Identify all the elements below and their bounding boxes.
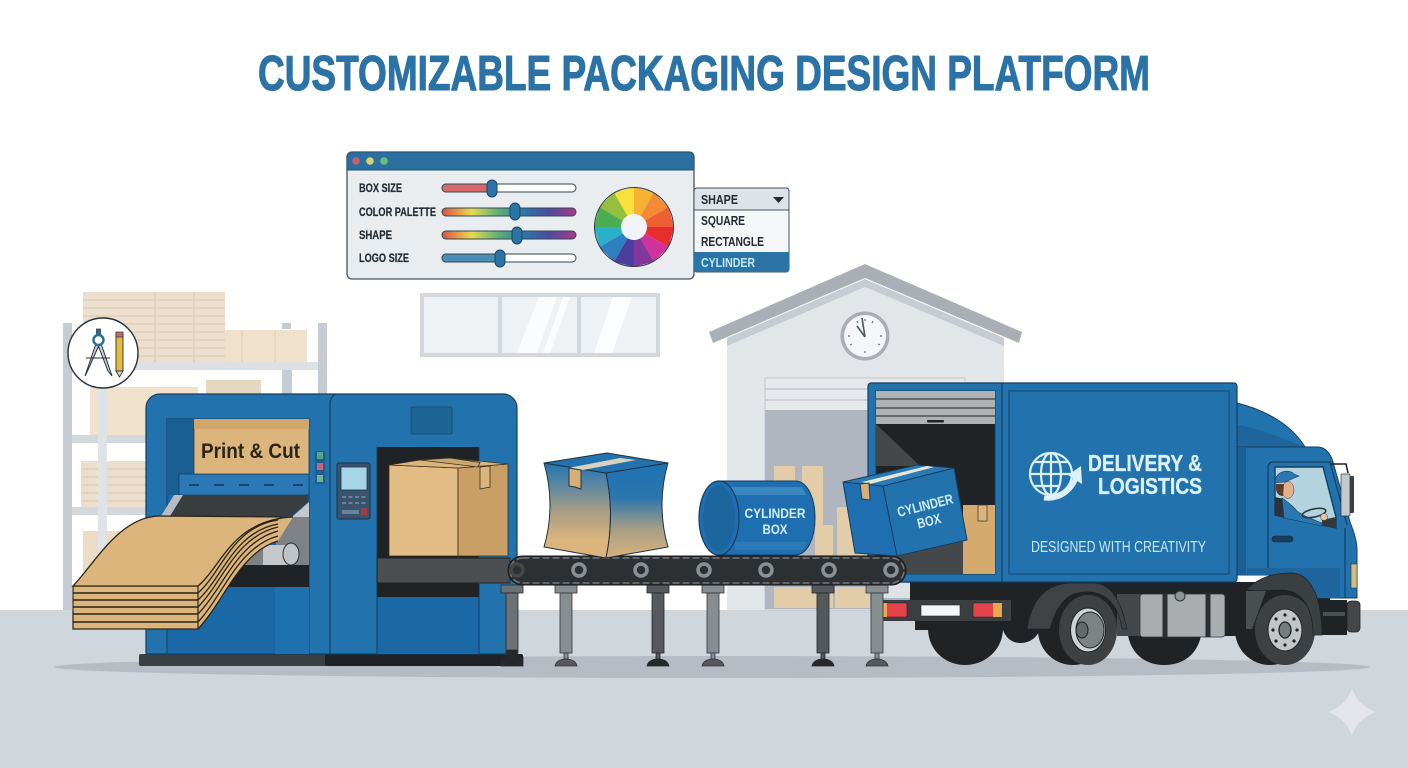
slider: shape xyxy=(442,227,576,244)
output conveyor bed xyxy=(377,558,510,597)
floor xyxy=(0,610,1408,768)
leg xyxy=(501,585,523,666)
cargo opening xyxy=(876,391,995,574)
slider: logo size xyxy=(442,250,576,267)
leg xyxy=(647,585,669,666)
tilted box entering truck: CYLINDER xyxy=(895,491,955,520)
slider labels xyxy=(359,183,436,265)
print and cut plate xyxy=(194,419,309,474)
rear fender xyxy=(1027,583,1127,629)
dropdown: shape options: SHAPE xyxy=(701,192,738,207)
rear wheel xyxy=(1038,595,1117,665)
top vent panel xyxy=(411,407,452,434)
dropdown: shape options: SQUARE xyxy=(701,213,745,228)
background window xyxy=(420,293,660,357)
leg xyxy=(812,585,834,666)
front fender and bumper xyxy=(1246,573,1360,635)
icon: compass and pencil badge xyxy=(68,318,138,388)
cylinder box on conveyor: CYLINDER xyxy=(744,505,806,521)
tagline: DESIGNED WITH CREATIVITY xyxy=(1031,539,1206,556)
panel: customization UI window xyxy=(347,152,694,279)
slider labels: LOGO SIZE xyxy=(359,253,409,265)
output opening xyxy=(377,447,479,654)
leg xyxy=(702,585,724,666)
dropdown: shape options: RECTANGLE xyxy=(701,234,764,249)
tilted box entering truck xyxy=(843,465,967,556)
color wheel xyxy=(594,187,674,267)
status buttons xyxy=(315,451,325,484)
conveyor belt xyxy=(508,556,906,585)
tilted box entering truck: BOX xyxy=(915,510,943,531)
gradient box on conveyor xyxy=(544,453,668,558)
delivery truck xyxy=(868,383,1360,665)
dropdown: shape options xyxy=(694,188,789,272)
belt rollers xyxy=(511,564,897,576)
cab window with driver xyxy=(1275,467,1336,528)
delivery and logistics text: LOGISTICS xyxy=(1098,473,1202,499)
slider labels: COLOR PALETTE xyxy=(359,207,436,219)
watermark star xyxy=(1328,688,1376,736)
icon: globe with arrow xyxy=(1030,453,1082,498)
floor shadow xyxy=(54,656,1370,678)
second rear wheel xyxy=(1127,625,1202,665)
truck chassis xyxy=(910,582,1330,665)
background warehouse xyxy=(709,264,1022,610)
slider labels: BOX SIZE xyxy=(359,183,402,195)
leg xyxy=(866,585,888,666)
title: CUSTOMIZABLE PACKAGING DESIGN PLATFORM xyxy=(258,47,1150,101)
fuel tank xyxy=(1117,591,1225,637)
slider: color palette xyxy=(442,203,576,220)
slider labels: SHAPE xyxy=(359,230,392,242)
cab body xyxy=(1237,403,1357,598)
conveyor belt legs xyxy=(501,585,888,666)
stacked cardboard sheets xyxy=(73,516,293,629)
rear bumper and lights xyxy=(883,600,1011,621)
cargo body xyxy=(868,383,1237,582)
leg xyxy=(555,585,577,666)
cylinder box on conveyor: BOX xyxy=(762,521,788,537)
print and cut machine xyxy=(139,394,523,666)
delivery and logistics text xyxy=(1088,450,1202,499)
cardboard box in machine xyxy=(389,458,508,556)
wall clock xyxy=(840,312,890,360)
front wheel xyxy=(1235,595,1315,665)
dropdown: shape options: CYLINDER xyxy=(701,255,755,270)
control panel xyxy=(337,463,370,519)
side mirror xyxy=(1330,464,1354,516)
left feed opening xyxy=(161,419,309,654)
print and cut plate: Print & Cut xyxy=(201,440,300,463)
cylinder box on conveyor xyxy=(699,481,815,555)
background shelving with boxes xyxy=(63,292,327,610)
slider: box size xyxy=(442,180,576,197)
delivery and logistics text: DELIVERY & xyxy=(1088,450,1202,476)
